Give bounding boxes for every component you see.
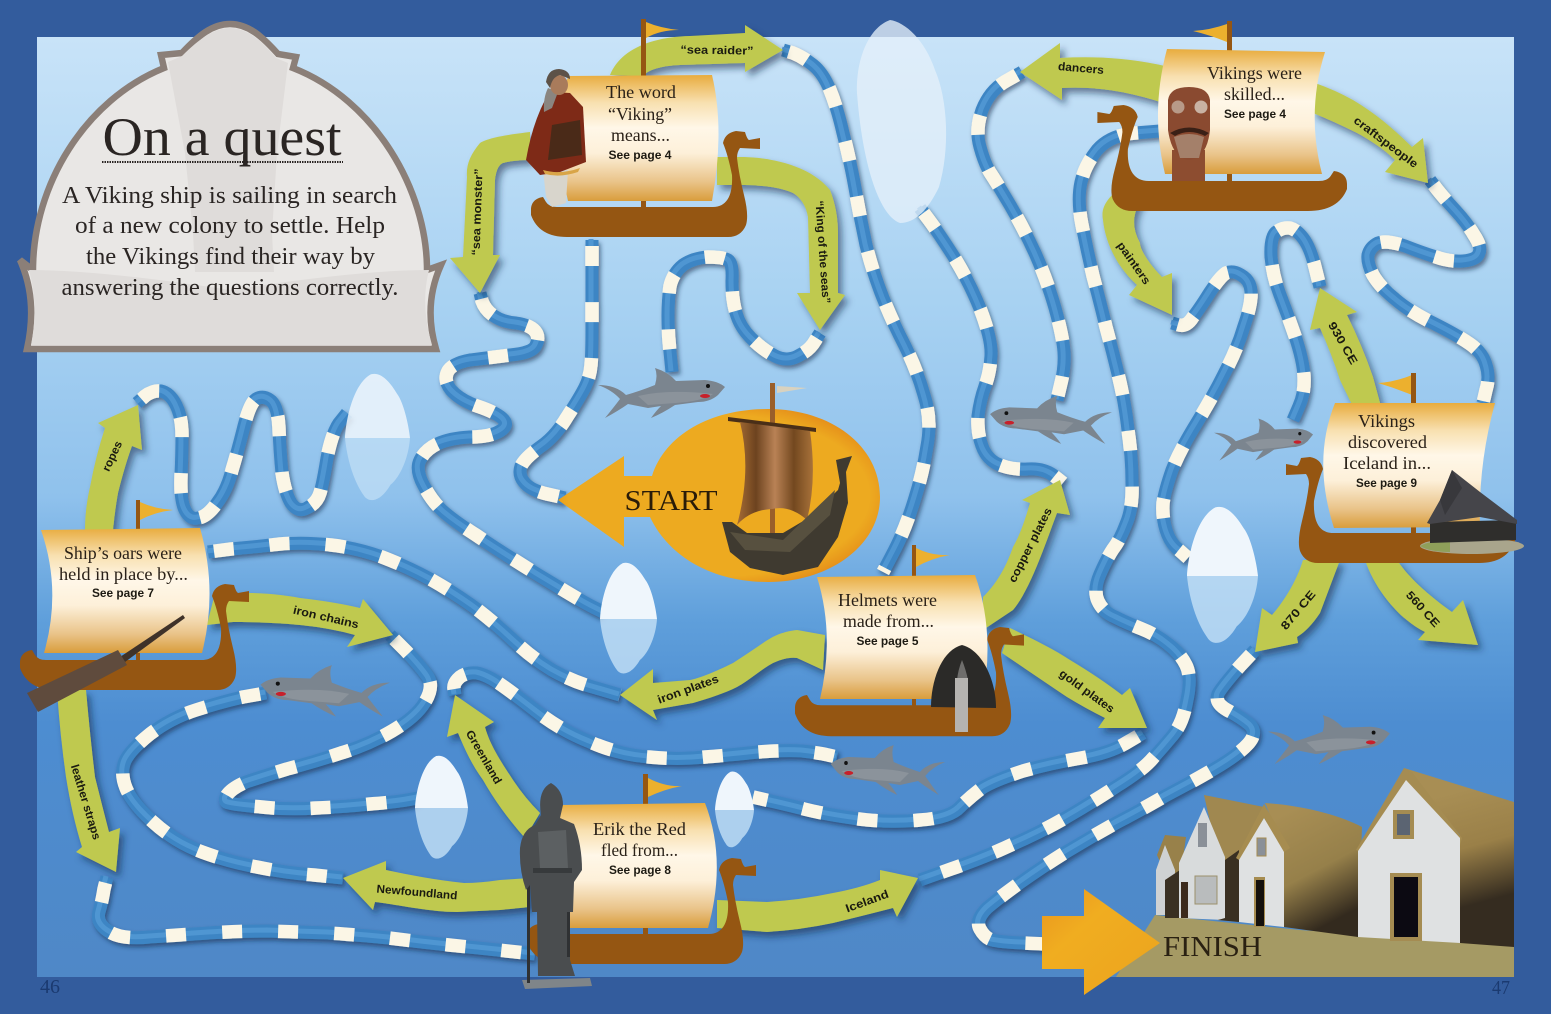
iceberg: right [1187, 507, 1258, 643]
shark lower centre [831, 745, 945, 795]
label: dancers: dancers [1057, 61, 1104, 77]
label: painters: painters [1114, 240, 1152, 287]
shark above start [598, 368, 725, 418]
question text: See page 9 [1356, 478, 1417, 490]
question text: “Viking” [608, 104, 672, 124]
pennant [777, 386, 807, 393]
question text: The word [606, 82, 676, 102]
label: copper plates: copper plates [1007, 506, 1055, 585]
sail [554, 803, 717, 928]
label: Greenland: Greenland [463, 729, 503, 786]
mast [641, 19, 646, 209]
arrow: dancers [1020, 43, 1165, 102]
hull highlight [730, 490, 835, 552]
ground [1116, 915, 1514, 977]
arrow: craftspeople [1313, 83, 1428, 183]
ship: Erik the Red [520, 774, 756, 989]
question text: means... [611, 125, 670, 145]
sail [560, 75, 718, 201]
question text: Ship’s oars were [64, 543, 182, 563]
question text [838, 590, 937, 648]
arrow: sea raider [610, 25, 783, 76]
sail [1158, 49, 1325, 174]
sail [1323, 403, 1495, 528]
flag [646, 22, 679, 38]
stone shape [20, 24, 441, 349]
ship: Vikings discovered Iceland [1286, 373, 1524, 563]
house 1 [1156, 835, 1186, 918]
label: leather straps: leather straps [68, 763, 102, 841]
arrow: 930 CE [1310, 288, 1382, 415]
label: sea raider: “sea raider” [680, 44, 754, 58]
label: gold plates: gold plates [1057, 668, 1116, 716]
flag [1378, 375, 1412, 395]
hull [795, 627, 1024, 736]
question text: See page 4 [1224, 109, 1287, 121]
label: 930 CE: 930 CE [1325, 320, 1359, 367]
label: 560 CE: 560 CE [1403, 589, 1442, 630]
stone lower band [29, 270, 432, 345]
question text [606, 82, 676, 162]
label: ropes: ropes [101, 439, 125, 473]
oar [27, 615, 185, 712]
shark centre right [990, 396, 1112, 444]
question text: See page 4 [608, 150, 672, 162]
question text: Helmets were [838, 590, 937, 610]
question text: Vikings were [1207, 63, 1302, 83]
statue of Erik [520, 783, 592, 989]
question text: made from... [843, 611, 934, 631]
question text: See page 5 [856, 636, 919, 648]
question text: discovered [1348, 432, 1427, 452]
intro text: the Vikings find their way by [86, 244, 375, 270]
start arrow and blob [558, 409, 880, 582]
ship: Ship's oars [20, 500, 249, 712]
arrow: sea monster [450, 132, 530, 293]
carved wooden head [1168, 87, 1210, 181]
page number 47: 47 [1492, 977, 1510, 999]
sharks [260, 368, 1390, 795]
question text: Erik the Red [593, 819, 686, 839]
hull [531, 131, 760, 237]
yard [728, 417, 816, 432]
question text: Vikings [1358, 411, 1415, 431]
sail [737, 422, 813, 525]
title panel: stone arch [20, 24, 441, 349]
flag [916, 548, 950, 567]
question text: skilled... [1224, 84, 1285, 104]
label: King of the seas: “King of the seas” [812, 200, 832, 304]
question text [1343, 411, 1431, 490]
sail [41, 528, 210, 653]
ship: Helmets [795, 545, 1024, 736]
title dotted underline [102, 161, 343, 163]
hull [1097, 105, 1347, 211]
label: Newfoundland: Newfoundland [376, 883, 458, 903]
arrow: gold plates [1002, 628, 1147, 728]
question text [1207, 63, 1302, 121]
mast [770, 383, 775, 533]
mast [136, 500, 140, 665]
label: iron plates: iron plates [656, 673, 720, 707]
question text: held in place by... [59, 564, 188, 584]
iceberg: top centre [857, 20, 946, 223]
intro text: answering the questions correctly. [62, 275, 398, 301]
arrow: 560 CE [1365, 560, 1478, 645]
question text: See page 7 [92, 588, 154, 600]
finish scene [1042, 768, 1514, 995]
iceberg: left [345, 374, 410, 500]
shark right [1214, 419, 1313, 461]
arrow: iron chains [207, 593, 393, 647]
flag [140, 502, 173, 520]
hull [722, 456, 852, 575]
label: Iceland: Iceland [844, 889, 891, 915]
mast [912, 545, 916, 707]
arrow: king of the seas [717, 157, 845, 330]
arrow: iron plates [620, 630, 825, 720]
label: iron chains: iron chains [292, 605, 360, 631]
house 3 [1236, 803, 1362, 937]
intro text [62, 183, 398, 301]
hull [20, 584, 249, 690]
iceberg: centre [600, 563, 657, 673]
arrow: Iceland [717, 870, 918, 932]
ship: The word Viking [526, 19, 760, 237]
title: On a quest [102, 107, 342, 167]
label: sea monster: “sea monster” [470, 168, 486, 256]
stone centre column [168, 28, 288, 272]
shark left [260, 665, 390, 717]
ship: Vikings were skilled [1097, 21, 1347, 211]
start marker [558, 383, 880, 582]
question text [59, 543, 188, 600]
arrow: 870 CE [1255, 560, 1340, 652]
arrow: ropes [85, 405, 142, 530]
intro text: A Viking ship is sailing in search [62, 183, 397, 209]
label: 870 CE: 870 CE [1279, 588, 1319, 633]
Viking longship [722, 383, 852, 575]
arrow labels [68, 44, 1442, 915]
label: craftspeople: craftspeople [1351, 115, 1420, 171]
iceberg: near Erik ship [715, 772, 754, 847]
FINISH label: FINISH [1163, 932, 1262, 963]
arrow: Greenland [447, 695, 540, 838]
mast [1227, 21, 1232, 184]
flag [648, 778, 682, 797]
intro text: of a new colony to settle. Help [75, 213, 385, 239]
page number 46: 46 [40, 976, 60, 998]
arrow: copper plates [983, 480, 1070, 630]
arrow: Newfoundland [343, 861, 530, 912]
hull [1286, 457, 1515, 563]
question text: See page 8 [609, 865, 672, 877]
hull [527, 858, 756, 964]
question text: Iceland in... [1343, 453, 1431, 473]
question text [593, 819, 686, 877]
helmet [931, 645, 996, 732]
stave church [1420, 470, 1524, 554]
arrow: leather straps [57, 690, 120, 872]
mast [643, 774, 648, 936]
iceberg: bottom left [415, 756, 468, 859]
sail [817, 575, 988, 699]
viking man figure [526, 69, 586, 207]
START label: START [624, 485, 718, 517]
question text: fled from... [601, 840, 678, 860]
mast [1411, 373, 1416, 535]
icebergs [345, 20, 1258, 859]
house 4 [1356, 768, 1514, 947]
shark lower right [1268, 715, 1390, 764]
finish arrow [1042, 889, 1160, 995]
arrow: painters [1102, 180, 1172, 315]
flag [1193, 24, 1227, 42]
house 2 [1179, 795, 1264, 922]
